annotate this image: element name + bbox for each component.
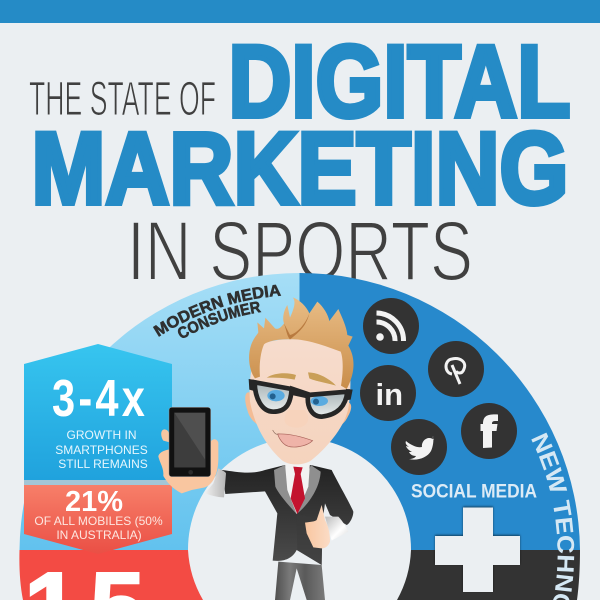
lapels	[274, 465, 321, 514]
legs	[275, 562, 325, 600]
banner: 3-4x growth: STILL REMAINS	[58, 457, 148, 471]
icon: plus cross	[435, 508, 520, 592]
shirt cuff left	[205, 468, 226, 497]
head	[245, 297, 354, 464]
ring segment: social media	[300, 273, 580, 550]
ring segment: dark	[397, 550, 580, 600]
title line: the state of: THE STATE OF	[29, 73, 216, 126]
curved label: modern media consumer: MODERN MEDIA	[152, 284, 282, 337]
phone hand	[158, 429, 218, 493]
ears	[245, 392, 351, 428]
curved label: modern media consumer: CONSUMER	[178, 302, 262, 338]
icon: pinterest	[428, 341, 484, 397]
character: businessman with phone	[158, 297, 354, 600]
banner: 21% of mobiles: 21%	[65, 486, 123, 518]
icon: facebook	[461, 403, 517, 459]
jacket hem shading	[297, 513, 323, 565]
banner: 21% of mobiles: IN AUSTRALIA)	[56, 528, 142, 542]
glasses frame	[255, 382, 347, 417]
ring chart	[19, 273, 580, 600]
face	[250, 339, 350, 464]
glasses bridge and temples	[249, 379, 353, 400]
eyebrows	[267, 372, 336, 386]
banner: 21% of mobiles: OF ALL MOBILES (50%	[34, 514, 163, 528]
thumbs up hand	[305, 505, 330, 548]
banner: 3-4x growth: GROWTH IN	[66, 428, 136, 442]
banner: 3-4x growth: SMARTPHONES	[55, 443, 148, 457]
banner: 3-4x growth: 3-4x	[52, 369, 148, 427]
icon: rss	[363, 298, 419, 354]
hair	[249, 297, 354, 389]
phone	[169, 407, 211, 477]
icon: linkedin: in	[376, 377, 403, 412]
title	[29, 24, 570, 298]
icon: twitter	[391, 419, 447, 475]
nose	[284, 410, 308, 428]
cheek line	[273, 430, 279, 434]
gap band between banners	[24, 480, 172, 485]
mouth	[278, 434, 313, 447]
hair parting shadow	[284, 313, 309, 339]
banner: 3-4x growth	[24, 344, 172, 480]
eyes	[267, 390, 285, 401]
top bar	[0, 0, 600, 23]
ring segment: modern media consumer	[20, 273, 300, 550]
banner: 21% of mobiles	[24, 485, 172, 554]
label: social media: SOCIAL MEDIA	[411, 482, 537, 502]
shirt cuff right	[325, 517, 348, 541]
social icons	[360, 298, 517, 475]
lenses	[255, 382, 292, 412]
right arm and jacket body	[222, 465, 353, 565]
title line: in sports: IN SPORTS	[127, 204, 473, 298]
shirt	[285, 463, 310, 514]
tie	[291, 467, 305, 514]
ring segment: red	[19, 550, 203, 600]
icon: linkedin	[360, 365, 416, 421]
